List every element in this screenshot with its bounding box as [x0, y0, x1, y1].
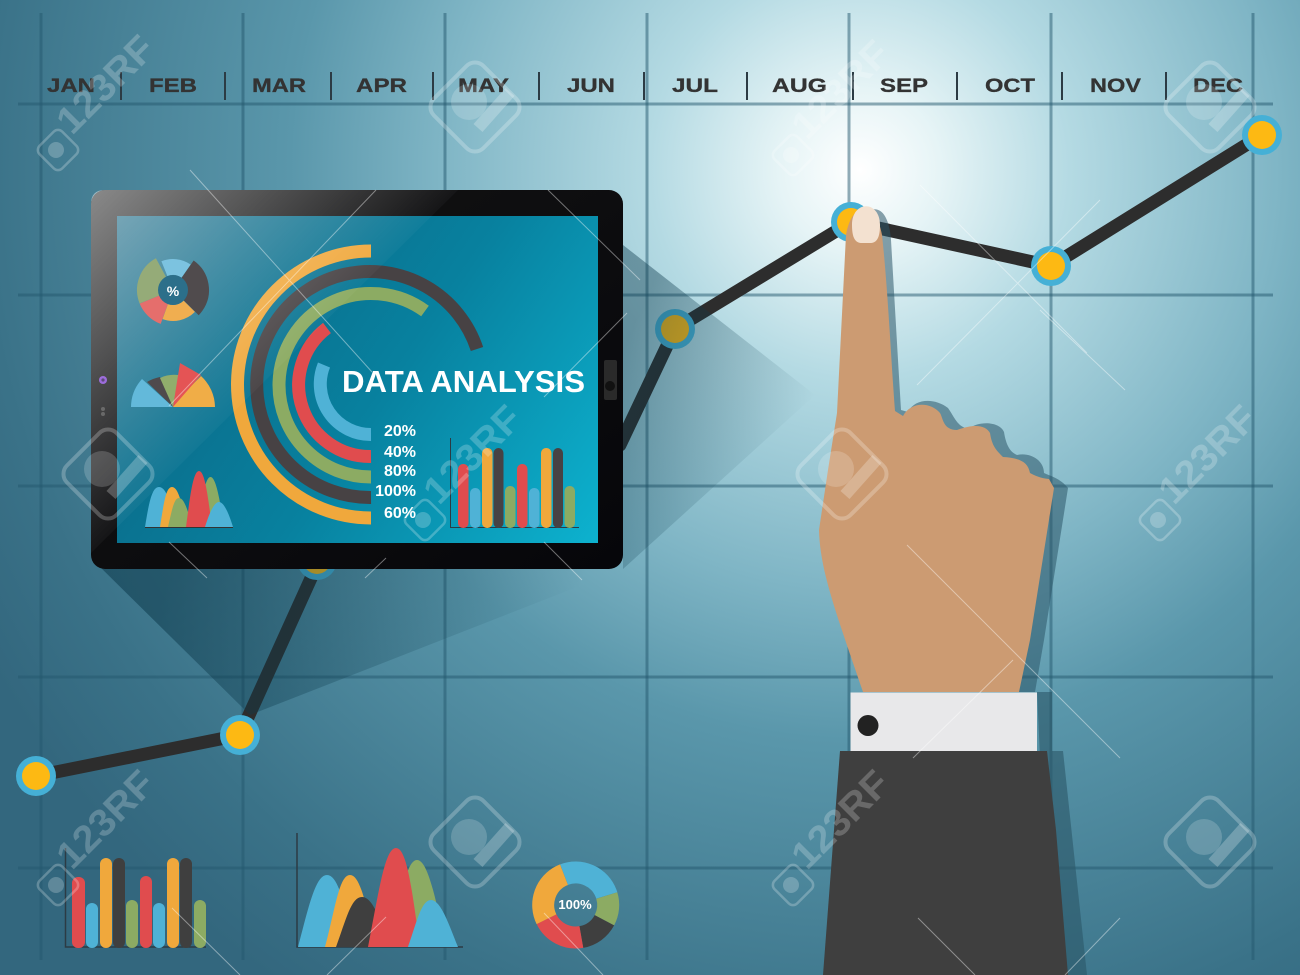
watermark small cameras — [35, 127, 1183, 908]
percentage labels: 80% — [384, 463, 416, 480]
tablet long shadow: lower — [95, 562, 623, 715]
bottom area chart — [297, 833, 463, 947]
watermark 123RF text: 123RF — [49, 763, 163, 877]
percentage labels — [375, 423, 416, 522]
progress arcs — [238, 251, 477, 518]
month header: OCT — [985, 76, 1035, 97]
month header: AUG — [772, 76, 827, 97]
month header — [47, 72, 1243, 100]
bottom donut chart — [532, 861, 620, 949]
tablet — [91, 190, 623, 569]
month header: JUL — [672, 76, 718, 97]
tablet screen — [117, 216, 598, 543]
watermark 123RF text: 123RF — [416, 398, 530, 512]
line chart — [16, 115, 1282, 796]
watermark 123RF text: 123RF — [49, 28, 163, 142]
percentage labels: 40% — [384, 444, 416, 461]
tablet long shadow: right — [623, 245, 815, 569]
watermark 123RF text: 123RF — [1151, 398, 1265, 512]
watermark 123RF text: 123RF — [784, 763, 898, 877]
bottom donut chart: 100% — [558, 897, 592, 912]
fan chart — [131, 363, 215, 407]
sleeve shadow — [1037, 692, 1087, 975]
heading: data analysis: DATA ANALYSIS — [342, 364, 585, 399]
shirt cuff — [850, 692, 1037, 752]
month header: JAN — [47, 76, 95, 97]
month header: APR — [356, 76, 407, 97]
small donut chart — [138, 255, 208, 325]
cuff button — [858, 715, 878, 736]
month header: NOV — [1090, 76, 1141, 97]
month header: JUN — [567, 76, 615, 97]
hand — [819, 209, 1054, 692]
small area chart — [145, 471, 233, 528]
month header: SEP — [880, 76, 928, 97]
month header: MAR — [252, 76, 306, 97]
fingernail — [852, 206, 880, 243]
tablet bar chart — [450, 438, 579, 528]
month header: MAY — [458, 76, 509, 97]
watermark camera stamps — [59, 58, 1259, 891]
watermark 123RF text: 123RF — [784, 33, 898, 147]
tablet glass reflection — [91, 190, 458, 553]
tablet body — [91, 190, 623, 569]
percentage labels: 60% — [384, 505, 416, 522]
watermark diagonals — [169, 170, 1125, 975]
suit sleeve — [823, 751, 1068, 975]
month header: DEC — [1193, 76, 1243, 97]
camera and buttons — [99, 360, 617, 416]
bottom bar chart — [66, 848, 206, 948]
percentage labels: 20% — [384, 423, 416, 440]
small donut chart: % — [167, 283, 180, 299]
percentage labels: 100% — [375, 483, 416, 500]
hand shadow — [850, 209, 1068, 692]
month header: FEB — [149, 76, 197, 97]
